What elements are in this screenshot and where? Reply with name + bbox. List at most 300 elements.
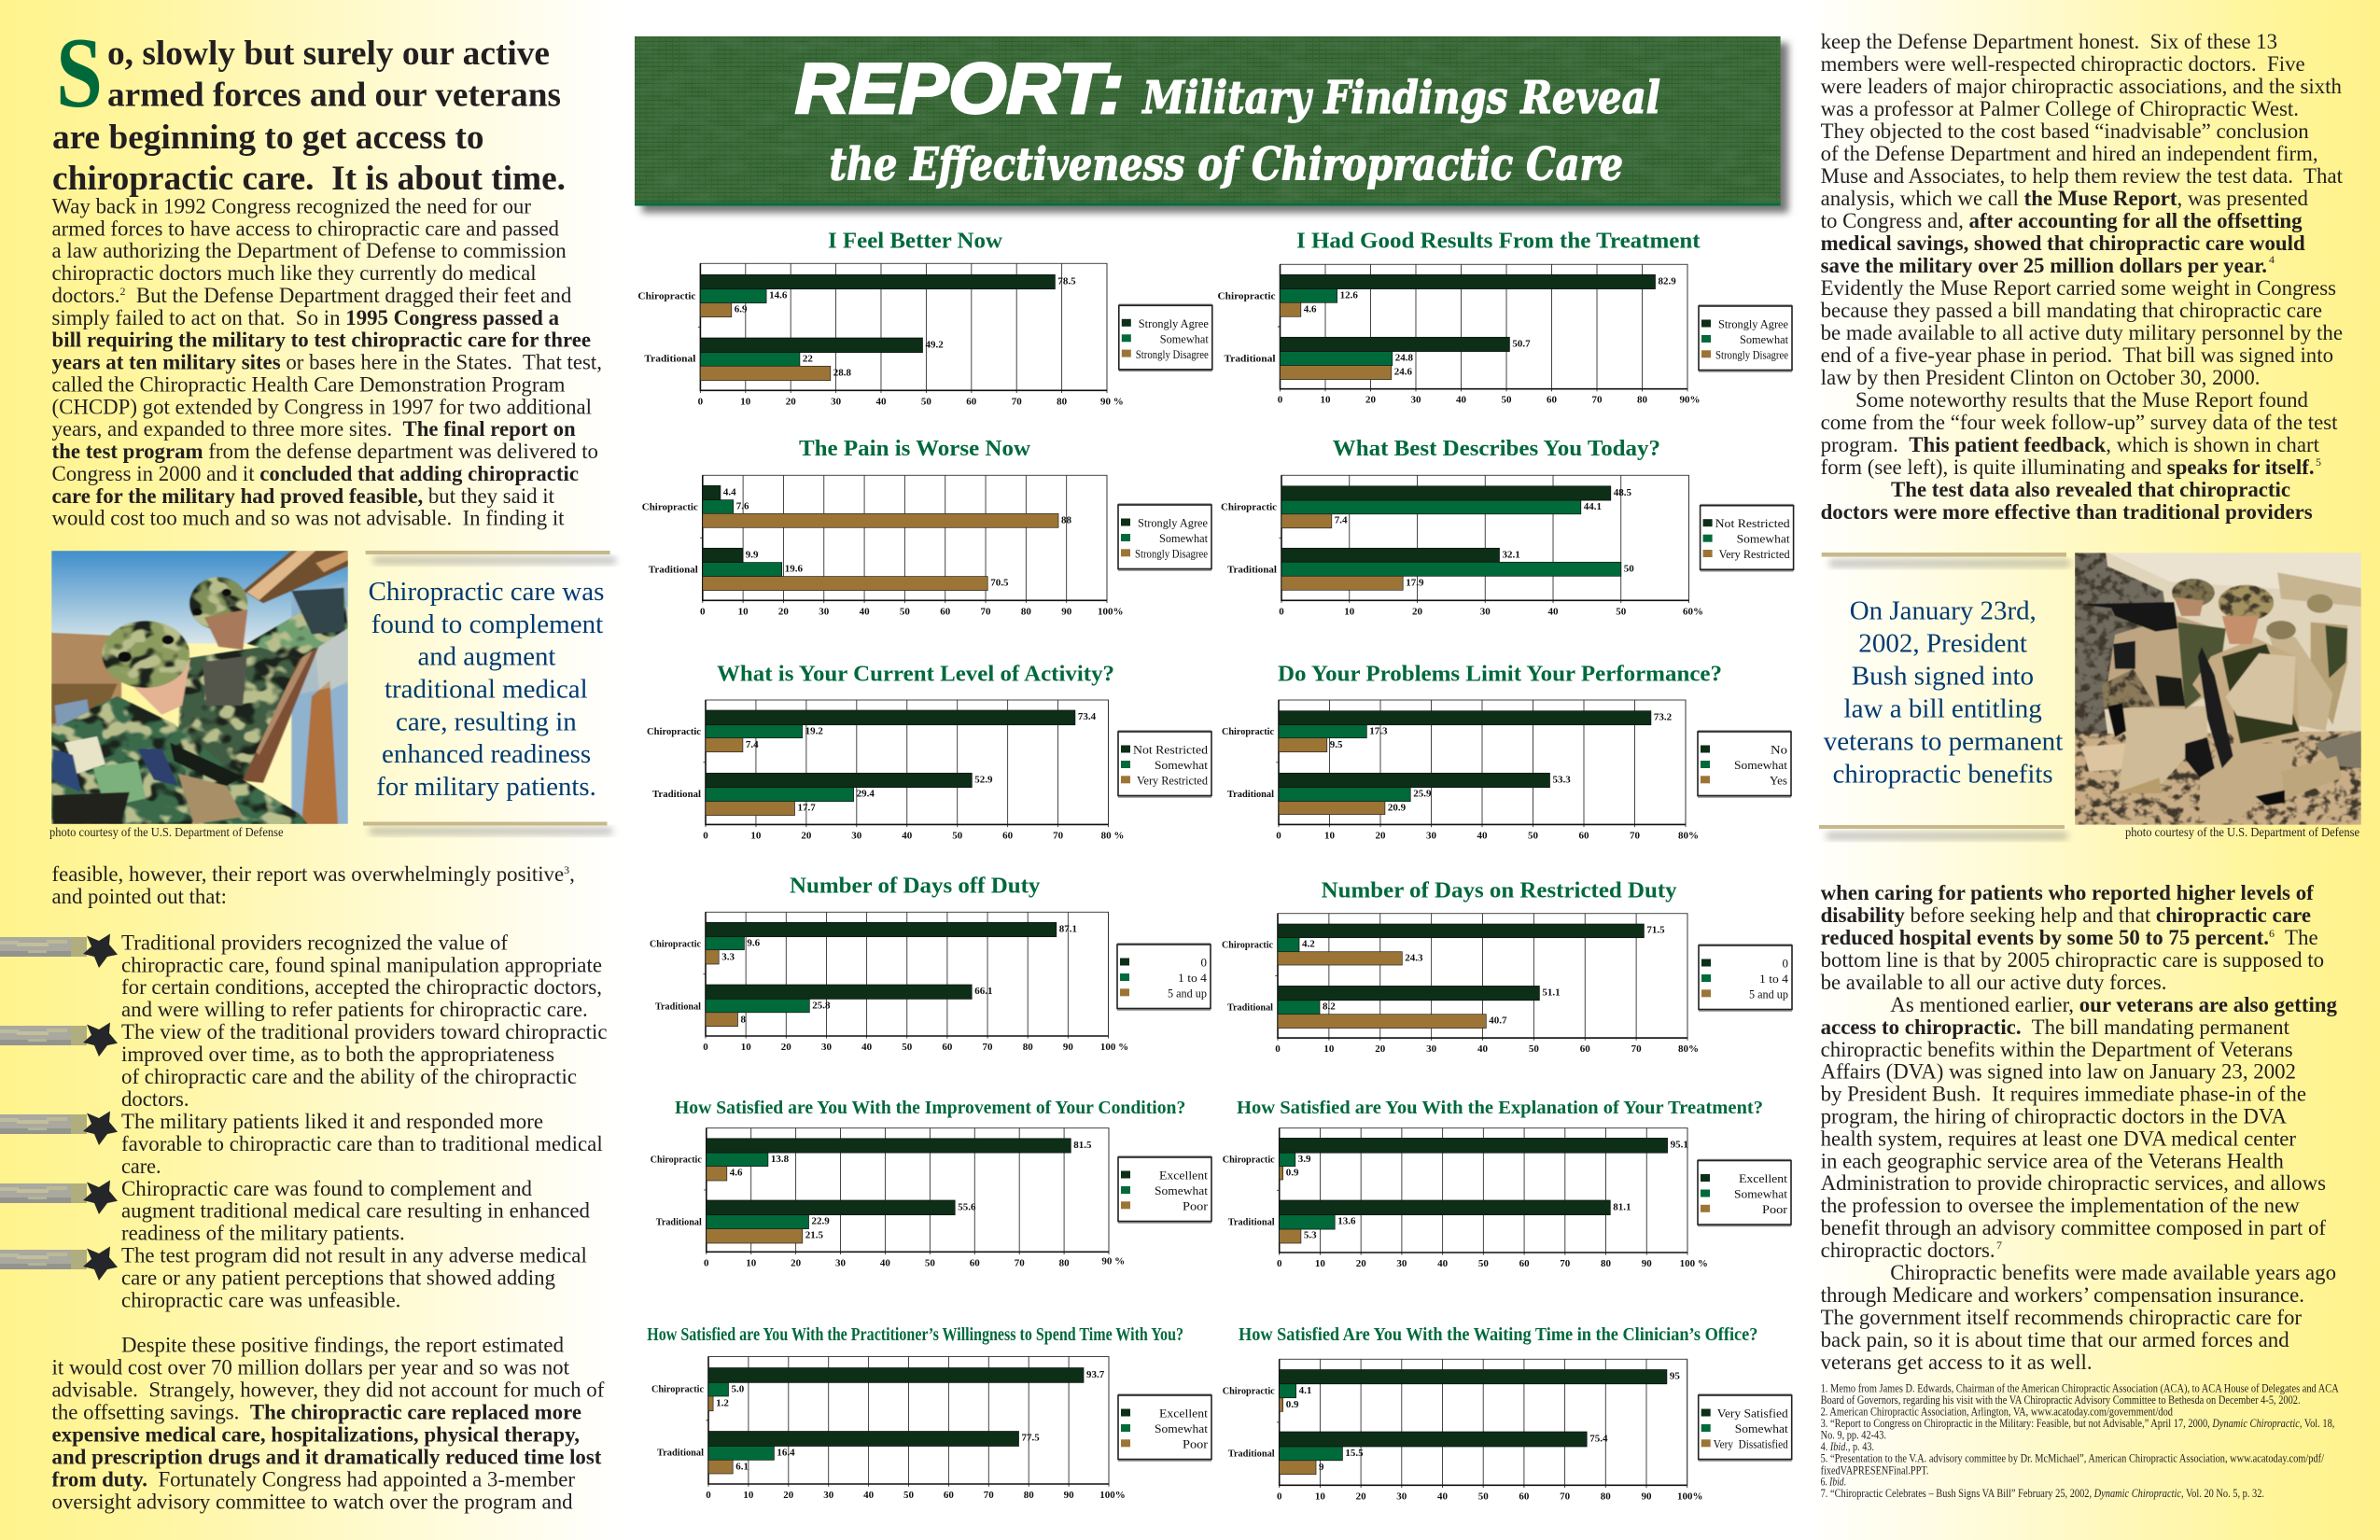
footnotes: 2. American Chiropractic Association, Arlington, VA, www.acatoday.com/government/dod [1821, 1406, 2174, 1419]
panel: Number of Days on Restricted Duty [1222, 878, 1792, 1055]
bar chart: Traditional [652, 789, 701, 800]
right text block bottom: The government itself recommends chiropractic care for [1821, 1306, 2302, 1329]
bar chart [651, 1128, 1125, 1268]
text continuation: 3 [564, 863, 569, 876]
bullet list text: and were willing to refer patients for chiropractic care. [121, 998, 588, 1021]
legend [1698, 731, 1791, 797]
right text block top: because they passed a bill mandating that chiropractic care [1821, 299, 2322, 322]
intro text block: chiropractic doctors much like they currently do medical [52, 261, 537, 285]
right text block bottom: by President Bush. It requires immediate phase-in of the [1821, 1083, 2306, 1106]
bar chart: 80 [1057, 396, 1068, 407]
bar chart: 75.4 [1589, 1433, 1608, 1444]
callout: January 23rd 2002: Bush signed into [1852, 661, 2034, 691]
bar chart: 25.8 [812, 1000, 831, 1011]
bar chart: 30 [1426, 1043, 1437, 1055]
callout: January 23rd 2002: veterans to permanent [1824, 726, 2063, 756]
right text block top [1821, 30, 2344, 524]
bar chart: 70.5 [990, 578, 1009, 589]
bar chart: 50 [1624, 563, 1634, 574]
bar chart: 50 [1478, 1258, 1489, 1269]
bar chart: 0 [1275, 1043, 1281, 1055]
bullet list text: care or any patient perceptions that showed adding [121, 1267, 555, 1290]
intro text block: would cost too much and so was not advisable. In finding it [52, 507, 565, 530]
bar chart: 0 [698, 396, 704, 407]
text continuation: , [569, 862, 575, 886]
intro text block: called the Chiropractic Health Care Demonstration Program [52, 372, 566, 396]
chart title: Number of Days on Restricted Duty [1322, 878, 1677, 903]
bar chart: 9.6 [747, 938, 761, 949]
legend [1117, 944, 1211, 1010]
legend: 1 to 4 [1759, 972, 1789, 986]
chart title: Number of Days off Duty [790, 874, 1040, 898]
legend [1699, 1394, 1792, 1461]
bar chart: 6.1 [735, 1462, 749, 1473]
legend: 5 and up [1168, 986, 1207, 1001]
bar chart [651, 1357, 1126, 1501]
right text block top: to Congress and, after accounting for all the offsetting [1821, 209, 2303, 232]
right text block top: keep the Defense Department honest. Six of these 13 [1821, 30, 2277, 53]
bar chart: 60 [1519, 1258, 1530, 1269]
bar chart: 95.1 [1671, 1140, 1688, 1151]
right text block top: were leaders of major chiropractic associations, and the sixth [1821, 75, 2342, 98]
bar chart: 0 [1277, 1258, 1282, 1269]
bullet list text: favorable to chiropractic care than to traditional medical [121, 1132, 603, 1155]
legend: Somewhat [1155, 1421, 1208, 1435]
closing text block: from duty. Fortunately Congress had appointed a 3-member [52, 1468, 575, 1491]
bar chart [642, 475, 1124, 617]
bar chart: 0 [1279, 606, 1284, 617]
bullet list text: Chiropractic care was found to complement and [121, 1177, 532, 1200]
bar chart: 10 [1323, 1043, 1335, 1055]
callout: complement and augment [363, 551, 616, 834]
left column [0, 18, 616, 1514]
callout: complement and augment: Chiropractic care was [369, 577, 604, 607]
bar chart: 10 [750, 830, 762, 841]
closing text block: Despite these positive findings, the report estimated [121, 1334, 564, 1357]
right text block top: end of a five-year phase in period. That bill was signed into [1821, 343, 2333, 367]
closing text block: and prescription drugs and it dramatically reduced time lost [52, 1446, 602, 1469]
bar chart: 24.8 [1395, 353, 1414, 364]
legend: Very Satisfied [1717, 1406, 1788, 1421]
bar chart: 9.9 [746, 549, 759, 560]
bar chart: Traditional [656, 1217, 702, 1228]
icon: bullet bar and star 5 [0, 1247, 118, 1281]
legend [1118, 731, 1211, 797]
bar chart: 10 [1320, 395, 1331, 406]
bar chart: 90 [1061, 606, 1072, 617]
right text block bottom: be available to all our active duty forces. [1821, 971, 2167, 994]
right text block bottom: through Medicare and workers’ compensation insurance. [1821, 1283, 2304, 1307]
bar chart: 0 [700, 606, 706, 617]
bar chart: 21.5 [805, 1230, 824, 1241]
bar chart: 95 [1670, 1370, 1680, 1381]
bar chart: 90 % [1101, 1256, 1125, 1267]
bar chart: Chiropractic [1223, 1155, 1275, 1166]
bullet list text: for certain conditions, accepted the chiropractic doctors, [121, 975, 602, 999]
footnotes: 3. “Report to Congress on Chiropractic in the Military: Feasible, but not Advisable,” April 17, 2000, Dynamic Chiropractic, Vol. 18, [1821, 1417, 2334, 1430]
footnotes: No. 9, pp. 42-43. [1821, 1429, 1886, 1442]
bar chart: 16.4 [777, 1447, 795, 1458]
bar chart: 20 [1356, 1258, 1366, 1269]
bar chart: 80 [1021, 606, 1031, 617]
right text block bottom: Chiropractic benefits were made available years ago [1890, 1261, 2336, 1284]
bar chart: Chiropractic [1221, 501, 1277, 512]
legend: Strongly Disagree [1136, 347, 1209, 361]
bar chart: Traditional [1227, 1002, 1273, 1014]
panel: What Best Describes You Today? [1221, 437, 1794, 617]
bullet list text: care. [121, 1155, 161, 1178]
bar chart: 15.5 [1345, 1448, 1364, 1459]
bullet list text: Traditional providers recognized the value of [121, 931, 508, 954]
right text block bottom: chiropractic doctors. [1821, 1239, 1995, 1262]
bar chart: 80 [1059, 1257, 1070, 1268]
bar chart [1222, 700, 1699, 841]
heading: are beginning to get access to [52, 118, 484, 156]
bar chart: 80 % [1101, 830, 1124, 841]
right text block top: The test data also revealed that chiropractic [1891, 478, 2290, 501]
legend: Strongly Disagree [1715, 347, 1788, 362]
legend [1118, 504, 1211, 570]
bar chart: Chiropractic [642, 501, 698, 512]
bar chart: 3.3 [721, 951, 735, 962]
bar chart: 70 [1053, 830, 1064, 841]
bar chart: 40 [861, 1042, 873, 1053]
bar chart: 20 [1356, 1491, 1366, 1502]
legend: Somewhat [1160, 331, 1209, 345]
bar chart: 0.9 [1286, 1399, 1299, 1410]
bar chart: 60 [942, 1042, 953, 1053]
bullet list text: chiropractic care was unfeasible. [121, 1288, 400, 1312]
legend: Strongly Agree [1139, 316, 1209, 330]
bar chart: 40 [860, 606, 870, 617]
bar chart: 40 [876, 396, 887, 407]
callout: complement and augment: enhanced readiness [382, 739, 591, 769]
bar chart: 50 [902, 1042, 913, 1053]
bullet list text: The test program did not result in any adverse medical [121, 1244, 587, 1267]
intro text block: a law authorizing the Department of Defense to commission [52, 239, 567, 262]
bar chart: 40 [1477, 830, 1488, 841]
bar chart: Traditional [1227, 789, 1274, 800]
bar chart: 24.3 [1405, 953, 1423, 964]
bar chart: 40 [1437, 1258, 1449, 1269]
icon: bullet bar and star 4 [0, 1180, 118, 1214]
legend: Somewhat [1735, 1421, 1788, 1435]
bar chart: 28.8 [833, 367, 852, 378]
banner title: the Effectiveness of Chiropractic Care [830, 139, 1623, 191]
callout: January 23rd 2002: On January 23rd, [1850, 595, 2037, 625]
bar chart: 30 [821, 1042, 833, 1053]
bar chart: 40 [1456, 395, 1467, 406]
bar chart: 55.6 [958, 1202, 976, 1213]
drop cap S: S [56, 18, 103, 129]
legend: Somewhat [1737, 532, 1790, 546]
bar chart: 53.3 [1553, 774, 1571, 785]
bar chart: 90 % [1100, 396, 1124, 407]
bar chart: 30 [1396, 1491, 1407, 1502]
bar chart: 70 [982, 1042, 993, 1053]
right text block bottom: chiropractic benefits within the Department of Veterans [1821, 1038, 2293, 1061]
bar chart: 6.9 [735, 304, 748, 315]
legend: Somewhat [1734, 1187, 1787, 1200]
bar chart: 70 [980, 606, 991, 617]
legend: Poor [1183, 1437, 1209, 1450]
bar chart: Chiropractic [1223, 1385, 1275, 1396]
bar chart: 29.4 [857, 789, 875, 800]
bar chart: 30 [823, 1490, 834, 1501]
callout: January 23rd 2002 [1819, 553, 2070, 839]
bar chart: 60 [1002, 830, 1014, 841]
bar chart [1217, 264, 1701, 406]
bar chart: 1.2 [716, 1398, 729, 1409]
bar chart: 60 [940, 606, 951, 617]
intro text block: bill requiring the military to test chiropractic care for three [52, 329, 591, 352]
chart title: The Pain is Worse Now [799, 437, 1031, 461]
bar chart: 100 % [1680, 1258, 1708, 1269]
bar chart: 60 [1547, 395, 1557, 406]
right text block top: 4 [2269, 253, 2275, 266]
right text block bottom: program, the hiring of chiropractic doctors in the DVA [1821, 1105, 2287, 1127]
icon: bullet bar and star 1 [0, 933, 118, 968]
bar chart: 9 [1319, 1462, 1324, 1473]
bar chart: 70 [1592, 395, 1603, 406]
bar chart: 13.8 [771, 1154, 790, 1165]
right text block top: come from the “four week follow-up” survey data of the test [1821, 411, 2338, 434]
right text block bottom: disability before seeking help and that chiropractic care [1821, 903, 2311, 927]
bar chart: 10 [1324, 830, 1335, 841]
legend: Very Restricted [1719, 547, 1790, 561]
bar chart: 81.5 [1073, 1140, 1092, 1151]
bar chart: 0 [706, 1490, 711, 1501]
bar chart: 50 [1616, 606, 1627, 617]
bar chart: 50 [903, 1490, 915, 1501]
right text block top: analysis, which we call the Muse Report, was presented [1821, 187, 2308, 210]
bar chart: 100 % [1100, 1042, 1128, 1053]
bar chart: 30 [1480, 606, 1491, 617]
panel: What is Your Current Level of Activity? [647, 662, 1211, 841]
legend: Very Restricted [1137, 773, 1208, 788]
callout: complement and augment: traditional medical [385, 674, 588, 704]
bar chart [647, 700, 1124, 841]
bar chart: 71.5 [1646, 925, 1665, 936]
bar chart: 50 [1528, 830, 1538, 841]
chart title: How Satisfied Are You With the Waiting Time in the Clinician’s Office? [1239, 1324, 1757, 1345]
bar chart: 13.6 [1337, 1216, 1356, 1227]
bullet list text: augment traditional medical care resulting in enhanced [121, 1199, 590, 1223]
bar chart: 52.9 [974, 774, 993, 785]
heading: o, slowly but surely our active [107, 34, 550, 72]
bar chart: 0.9 [1286, 1168, 1299, 1179]
legend [1118, 1156, 1211, 1223]
right text block top: be made available to all active duty military personnel by the [1821, 321, 2343, 344]
bar chart: 70 [1630, 830, 1641, 841]
chart title: How Satisfied are You With the Explanation of Your Treatment? [1237, 1098, 1763, 1118]
bar chart: 80% [1678, 830, 1699, 841]
legend [1701, 505, 1794, 571]
panel: Waiting Time [1223, 1324, 1792, 1502]
right text block bottom: Affairs (DVA) was signed into law on January 23, 2002 [1821, 1060, 2296, 1084]
bar chart: 0 [703, 830, 708, 841]
bar chart: 80% [1678, 1043, 1699, 1055]
panel: Number of Days off Duty [650, 874, 1211, 1053]
callout: complement and augment: for military patients. [376, 772, 596, 802]
right text block top: law by then President Clinton on October 30, 2000. [1821, 366, 2261, 389]
bar chart: 66.1 [974, 986, 992, 997]
intro text block: Congress in 2000 and it concluded that adding chiropractic [52, 462, 579, 485]
panel: Practitioner's Willingness [647, 1324, 1211, 1501]
bullet list text: of chiropractic care and the ability of the chiropractic [121, 1065, 577, 1088]
legend [1699, 945, 1792, 1011]
right column [1819, 30, 2361, 1500]
legend: 0 [1783, 956, 1788, 971]
icon: bullet bar and star 3 [0, 1111, 118, 1145]
panel: I Had Good Results From the Treatment [1217, 230, 1792, 406]
right text block bottom: access to chiropractic. The bill mandating permanent [1821, 1015, 2290, 1039]
bar chart: 60 [1519, 1491, 1530, 1502]
chart title: Do Your Problems Limit Your Performance? [1278, 662, 1722, 686]
bar chart: 20.9 [1388, 803, 1407, 814]
bar chart: 20 [783, 1490, 794, 1501]
footnotes: 7. “Chiropractic Celebrates – Bush Signs VA Bill” February 25, 2002, Dynamic Chiropractic, Vol. 20 No. 5, p. 32. [1821, 1487, 2264, 1500]
legend [1698, 1159, 1791, 1226]
bar chart: 50 [1529, 1043, 1539, 1055]
bar chart: 50 [921, 396, 931, 407]
bar chart: 8 [741, 1014, 747, 1025]
legend: Poor [1762, 1202, 1788, 1216]
right text block top: of the Defense Department and hired an independent firm, [1821, 142, 2318, 165]
bar chart: 40.7 [1489, 1015, 1507, 1027]
bullet list text: chiropractic care, found spinal manipulation appropriate [121, 953, 602, 976]
bar chart: 90 [1063, 1042, 1073, 1053]
bar chart: Chiropractic [650, 938, 701, 949]
bullet list text: readiness of the military patients. [121, 1222, 405, 1245]
bar chart: Traditional [1227, 564, 1277, 575]
closing text block: it would cost over 70 million dollars per year and so was not [52, 1356, 570, 1379]
icon: bullet bar and star 2 [0, 1023, 118, 1057]
bar chart: 7.4 [746, 739, 759, 750]
intro text block: armed forces to have access to chiropractic care and passed [52, 217, 559, 240]
bar chart: 20 [1365, 395, 1376, 406]
bar chart: 4.6 [1304, 303, 1317, 315]
right text block top: save the military over 25 million dollars per year. [1821, 254, 2267, 277]
right text block bottom: health system, requires at least one DVA medical center [1821, 1127, 2296, 1150]
bar chart: 50 [952, 830, 963, 841]
bar chart: 20 [1375, 1043, 1386, 1055]
bar chart: 20 [791, 1257, 802, 1268]
bar chart: 22.9 [811, 1216, 830, 1227]
bar chart [1223, 1128, 1708, 1269]
callout: January 23rd 2002: 2002, President [1858, 628, 2027, 658]
bar chart: 30 [831, 396, 842, 407]
photo: soldiers in desert uniforms [2075, 553, 2361, 825]
callout: complement and augment: found to complement [371, 609, 603, 639]
bar chart: 80 [1601, 1491, 1611, 1502]
bar chart: 30 [835, 1257, 846, 1268]
bar chart: 60 [944, 1490, 954, 1501]
banner title: REPORT: [795, 49, 1124, 129]
bar chart: Chiropractic [1217, 290, 1276, 301]
bar chart: 70 [1631, 1043, 1642, 1055]
bar chart: 10 [743, 1490, 754, 1501]
bar chart: 40 [1547, 606, 1559, 617]
intro text block: simply failed to act on that. So in 1995 Congress passed a [52, 306, 559, 329]
bar chart: 10 [1315, 1258, 1325, 1269]
bar chart: 100% [1098, 606, 1124, 617]
right text block top: Muse and Associates, to help them review the test data. That [1821, 164, 2344, 188]
right text block bottom: in each geographic service area of the Veterans Health [1821, 1149, 2284, 1172]
right text block top: 5 [2316, 455, 2321, 469]
bar chart: 40 [902, 830, 913, 841]
legend: Excellent [1159, 1169, 1208, 1182]
bar chart: 30 [1396, 1258, 1407, 1269]
right text block bottom: the profession to oversee the implementation of the new [1821, 1194, 2300, 1217]
bar chart: 80 [1637, 395, 1648, 406]
bar chart: 10 [741, 1042, 751, 1053]
legend: 5 and up [1749, 987, 1788, 1001]
legend: Not Restricted [1133, 743, 1209, 756]
bar chart: Traditional [649, 564, 698, 575]
right text block top: They objected to the cost based “inadvisable” conclusion [1821, 119, 2309, 143]
text continuation: and pointed out that: [52, 885, 227, 908]
bar chart: 8.2 [1323, 1001, 1336, 1013]
bar chart: 17.9 [1406, 577, 1424, 588]
bullet list text: The view of the traditional providers toward chiropractic [121, 1020, 607, 1043]
bar chart: Traditional [655, 1001, 701, 1012]
bar chart: Chiropractic [647, 726, 701, 737]
bar chart: 20 [1412, 606, 1422, 617]
legend: Excellent [1739, 1171, 1787, 1185]
bar chart: 48.5 [1614, 487, 1632, 498]
bar chart: 77.5 [1021, 1432, 1040, 1443]
bar chart: Traditional [1228, 1217, 1275, 1228]
intro text block: Way back in 1992 Congress recognized the need for our [52, 194, 531, 218]
bar chart: 19.6 [785, 564, 803, 575]
bar chart: 44.1 [1584, 501, 1602, 512]
bar chart: 49.2 [926, 339, 944, 350]
right text block top: Some noteworthy results that the Muse Report found [1855, 388, 2308, 412]
legend: 1 to 4 [1178, 971, 1208, 985]
bar chart: 40 [880, 1257, 890, 1268]
bar chart: 19.2 [805, 726, 823, 737]
bar chart: 60 [970, 1257, 980, 1268]
bar chart: Chiropractic [637, 290, 696, 301]
right text block bottom: 7 [1996, 1239, 2002, 1252]
closing text block: advisable. Strangely, however, they did not account for much of [52, 1379, 605, 1402]
bar chart: 0 [703, 1042, 708, 1053]
bar chart: 70 [1012, 396, 1022, 407]
bar chart: 50 [1501, 395, 1512, 406]
right text block bottom: Administration to provide chiropractic services, and allows [1821, 1171, 2326, 1195]
closing text block: the offsetting savings. The chiropractic care replaced more [52, 1401, 581, 1424]
text continuation: feasible, however, their report was overwhelmingly positive [52, 862, 567, 886]
legend: No [1771, 743, 1787, 756]
bar chart: 100% [1099, 1490, 1126, 1501]
bar chart: 3.9 [1298, 1154, 1311, 1165]
photo caption: photo courtesy of the U.S. Department of Defense [2125, 826, 2359, 840]
bar chart: 40 [863, 1490, 875, 1501]
legend [1118, 1394, 1211, 1461]
bar chart: 25.9 [1413, 789, 1432, 800]
footnotes [1821, 1381, 2339, 1500]
legend: Yes [1770, 773, 1787, 788]
legend: 0 [1200, 956, 1207, 969]
legend: Somewhat [1740, 332, 1788, 346]
right text block bottom: As mentioned earlier, our veterans are also getting [1890, 993, 2337, 1016]
bar chart: 87.1 [1059, 923, 1077, 934]
legend: Strongly Disagree [1135, 547, 1208, 560]
right text block top: Evidently the Muse Report carried some weight in Congress [1821, 276, 2336, 300]
bar chart: 4.6 [730, 1168, 743, 1179]
legend: Somewhat [1734, 758, 1787, 772]
